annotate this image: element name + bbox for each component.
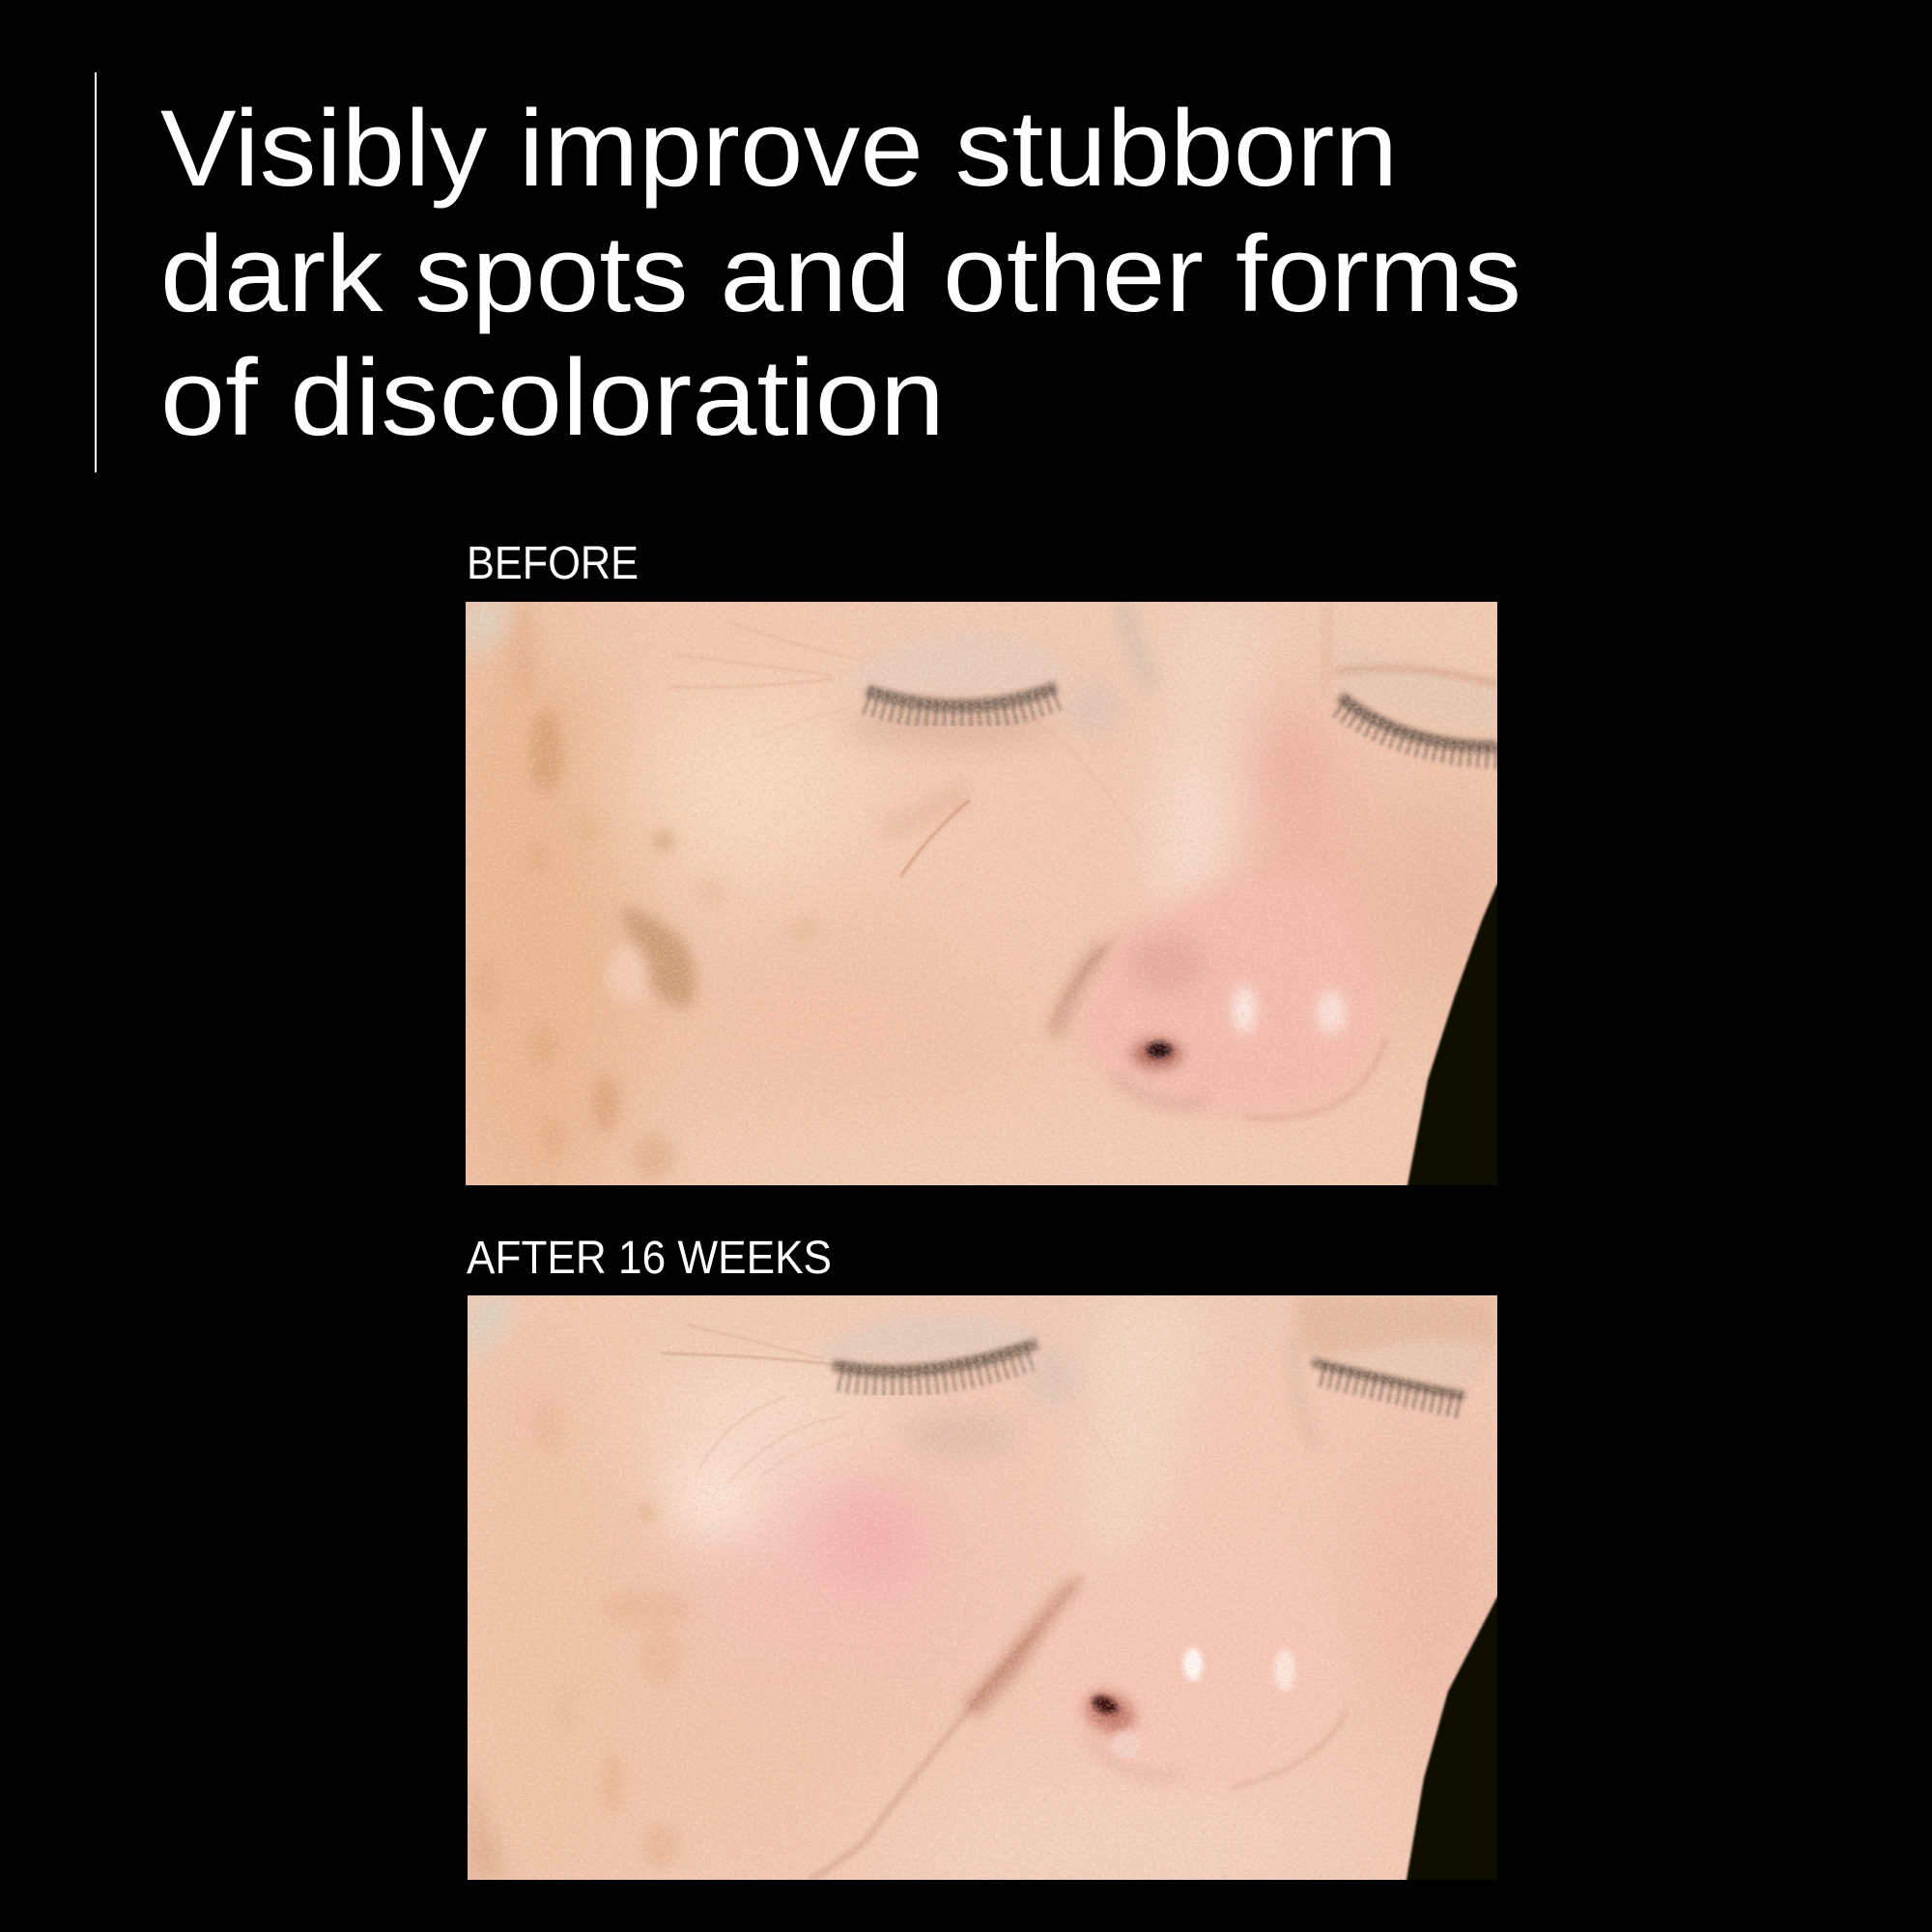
nasolabial fold bbox=[810, 1576, 1095, 1880]
eyes bbox=[815, 1295, 1497, 1457]
infographic canvas bbox=[95, 72, 1518, 1880]
large age spot bbox=[607, 907, 696, 1008]
hair at temple bbox=[466, 602, 512, 656]
eyes bbox=[842, 602, 1497, 756]
background wedge bbox=[1406, 882, 1497, 1185]
label: before: BEFORE bbox=[467, 538, 639, 589]
wrinkles under the eye bbox=[661, 1323, 843, 1484]
vertical accent rule bbox=[95, 72, 97, 472]
faded spots bbox=[536, 1404, 695, 1869]
crease under eye bbox=[668, 633, 972, 878]
skin texture bbox=[466, 602, 1497, 1185]
nose bbox=[1048, 874, 1386, 1119]
freckles and dark spots bbox=[473, 602, 821, 1180]
title bbox=[160, 88, 1521, 458]
skin texture bbox=[468, 1295, 1497, 1880]
nose bbox=[1034, 1582, 1347, 1791]
title: of discoloration bbox=[160, 337, 945, 458]
background wedge bbox=[1406, 1585, 1520, 1914]
photo: before bbox=[466, 602, 1497, 1185]
photo: after 16 weeks bbox=[468, 1295, 1497, 1880]
title: Visibly improve stubborn bbox=[160, 88, 1398, 209]
title: dark spots and other forms bbox=[160, 213, 1521, 334]
label: after 16 weeks: AFTER 16 WEEKS bbox=[467, 1233, 832, 1284]
